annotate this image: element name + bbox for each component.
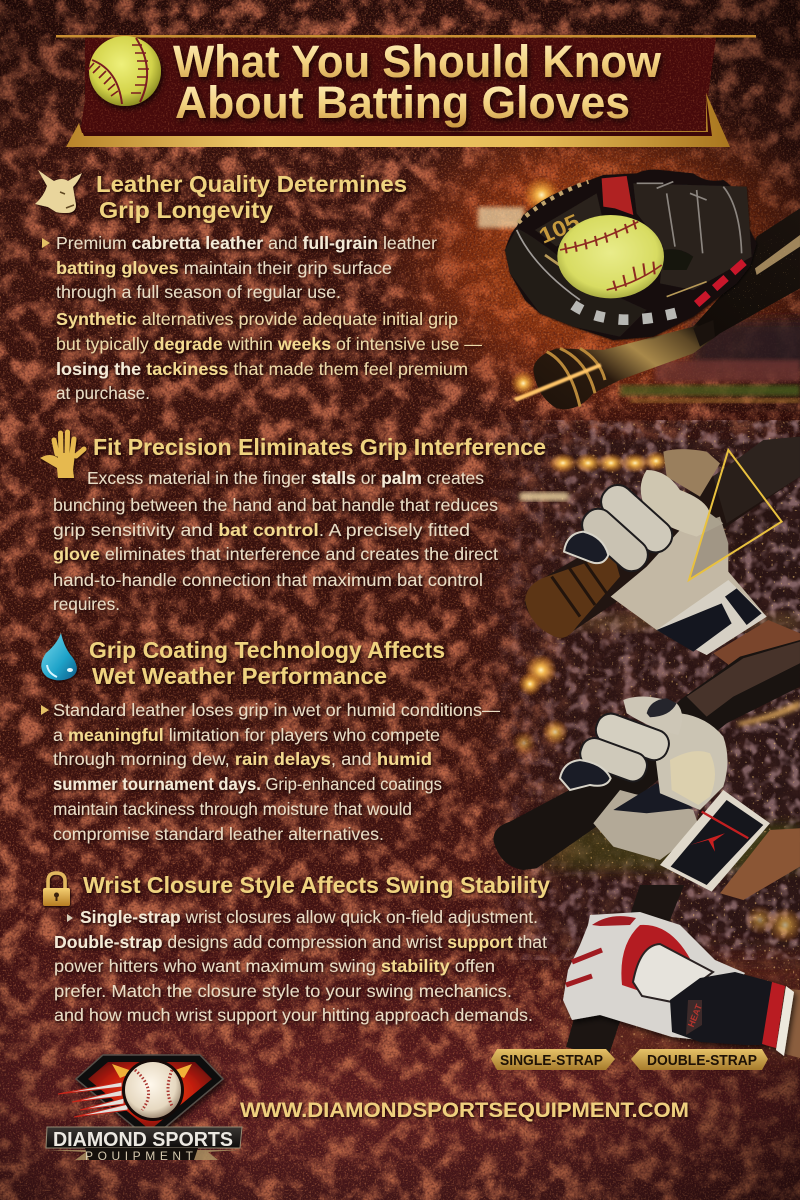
upper rim with laces — [518, 182, 588, 223]
heading — [89, 637, 445, 689]
section: wrist closure — [43, 872, 550, 1025]
forearm — [713, 620, 800, 673]
body text — [54, 907, 547, 1025]
icon: gold hand — [40, 432, 84, 478]
website URL: WWW.DIAMONDSPORTSEQUIPMENT.COM — [240, 1099, 689, 1122]
body text: Standard leather loses grip in wet or humid conditions— — [53, 700, 501, 720]
body text: at purchase. — [56, 383, 150, 403]
heading — [96, 171, 407, 223]
title text — [173, 36, 662, 128]
body text: Double-strap designs add compression and wrist support that — [54, 932, 547, 952]
bat — [533, 208, 800, 409]
softball in pocket — [557, 215, 664, 298]
body text: Premium cabretta leather and full-grain leather — [56, 233, 437, 253]
body text: but typically degrade within weeks of intensive use — — [56, 334, 483, 354]
body text: grip sensitivity and bat control . A precisely fitted — [53, 520, 470, 540]
spark flares — [511, 177, 560, 396]
heading: Wrist Closure Style Affects Swing Stability — [83, 872, 550, 898]
stadium lights — [478, 207, 800, 943]
title text: What You Should Know — [173, 36, 662, 87]
icon: padlock — [43, 873, 70, 906]
webbing — [633, 183, 752, 290]
body text — [42, 233, 483, 403]
body text: Single-strap wrist closures allow quick on-field adjustment. — [80, 907, 538, 927]
body text: losing the tackiness that made them feel premium — [56, 359, 468, 379]
logo: Diamond Sports — [46, 1055, 242, 1163]
title text: About Batting Gloves — [175, 77, 630, 128]
lower palm — [593, 790, 700, 860]
spark streak — [513, 363, 602, 402]
speed streaks — [58, 1082, 128, 1117]
title banner — [56, 35, 756, 147]
icon: softball — [88, 36, 161, 106]
body text: maintain tackiness through moisture that would — [53, 799, 412, 819]
section: grip coating — [41, 633, 501, 844]
heading: Leather Quality Determines — [96, 171, 407, 197]
glove palm and wrist strap — [611, 517, 767, 655]
gray lacing — [573, 305, 687, 320]
bat — [525, 437, 800, 638]
body text: compromise standard leather alternatives. — [53, 824, 384, 844]
nameplate: DIAMOND SPORTS — [53, 1129, 233, 1151]
body text: power hitters who want maximum swing stability offen — [54, 956, 495, 976]
fielding glove: 105 — [535, 209, 583, 249]
body text: hand-to-handle connection that maximum bat control — [53, 570, 483, 590]
wrist strap — [660, 790, 770, 892]
forearm — [780, 988, 800, 1058]
baseball — [122, 1059, 184, 1121]
fingers — [564, 479, 679, 578]
badge: single-strap: SINGLE-STRAP — [500, 1052, 603, 1069]
photo: glove, softball and bat — [505, 170, 800, 409]
section: leather quality — [35, 170, 483, 403]
body text: through morning dew, rain delays , and humid — [53, 749, 432, 769]
thumb panel — [505, 228, 647, 337]
body text: glove eliminates that interference and creates the direct — [53, 544, 498, 564]
stadium crowd backdrop — [470, 320, 800, 1060]
nameplate: POUIPMENT — [85, 1149, 194, 1163]
body text: and how much wrist support your hitting approach demands. — [54, 1005, 533, 1025]
photo: white and red batting glove — [563, 885, 800, 1058]
body text: summer tournament days. Grip-enhanced coatings — [53, 774, 442, 794]
body text: batting gloves maintain their grip surface — [56, 258, 392, 278]
diamond emblem — [76, 1055, 223, 1140]
red web strap — [602, 176, 633, 215]
back of hand and thumb — [653, 713, 727, 810]
body text: Excess material in the finger stalls or palm creates — [87, 468, 484, 488]
section: fit precision — [40, 432, 546, 614]
photo: hand gripping bat with gold triangle — [525, 437, 800, 673]
forearm — [720, 828, 800, 900]
glove body: HEAT — [686, 1002, 704, 1029]
body text: a meaningful limitation for players who compete — [53, 725, 440, 745]
body text: bunching between the hand and bat handle that reduces — [53, 495, 498, 515]
glove body — [563, 912, 794, 1056]
body text — [41, 700, 501, 844]
bat — [630, 885, 684, 925]
heading: Grip Longevity — [99, 197, 273, 223]
icon: water drop — [41, 633, 77, 680]
heading: Wet Weather Performance — [92, 663, 387, 689]
icon: donkey head — [35, 170, 82, 213]
body text: requires. — [53, 594, 120, 614]
gold triangle — [689, 450, 782, 580]
body text — [53, 468, 498, 614]
body text: through a full season of regular use. — [56, 282, 341, 302]
nameplate — [46, 1127, 242, 1163]
fingers — [560, 710, 673, 790]
thumb — [663, 449, 720, 497]
red lacing — [697, 258, 748, 304]
photo: second hand gripping dark bat — [493, 640, 800, 900]
body text: prefer. Match the closure style to your swing mechanics. — [54, 981, 512, 1001]
body text: Synthetic alternatives provide adequate initial grip — [56, 309, 458, 329]
fielding glove — [505, 170, 757, 340]
badge: double-strap: DOUBLE-STRAP — [647, 1052, 757, 1069]
heading: Grip Coating Technology Affects — [89, 637, 445, 663]
heading: Fit Precision Eliminates Grip Interference — [93, 434, 546, 460]
bat — [493, 640, 800, 870]
